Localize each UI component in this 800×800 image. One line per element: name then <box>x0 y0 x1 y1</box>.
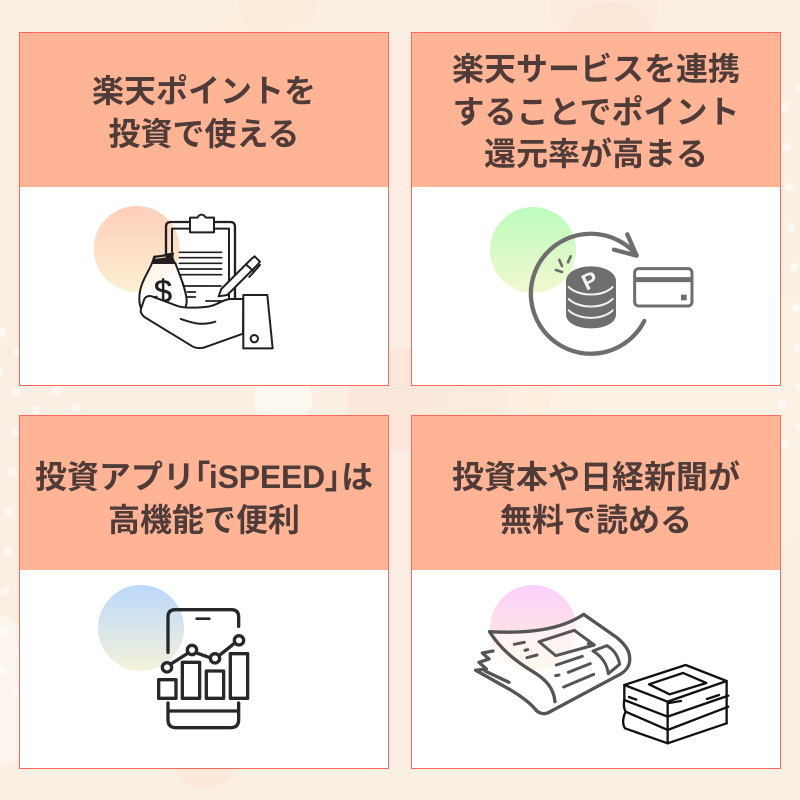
icon: smartphone with growth chart <box>98 585 250 730</box>
header band 2 <box>412 33 780 187</box>
heading 2: 楽天サービスを連携 <box>452 51 740 87</box>
header band 3 <box>20 416 388 570</box>
heading 3 <box>35 459 373 538</box>
icon: newspaper and books <box>474 585 730 744</box>
header band 1 <box>20 33 388 187</box>
header band 4 <box>412 416 780 570</box>
panel: 楽天サービスを連携することでポイント還元率が高まる <box>411 32 781 386</box>
heading 3: 投資アプリ「iSPEED」は <box>35 459 373 495</box>
heading 1: 楽天ポイントを <box>92 73 316 109</box>
heading 2: することでポイント <box>452 94 740 130</box>
icon: point coins and card cycle <box>490 207 694 356</box>
heading 2: 還元率が高まる <box>484 136 708 172</box>
heading 4 <box>452 459 740 538</box>
heading 2 <box>452 51 740 172</box>
heading 1: 投資で使える <box>108 116 300 152</box>
heading 4: 無料で読める <box>500 502 692 538</box>
heading 1 <box>92 73 316 152</box>
icon: point coins and card cycle: P <box>577 265 602 295</box>
heading 3: 高機能で便利 <box>108 502 300 538</box>
panel: 楽天ポイントを投資で使える <box>19 32 389 386</box>
heading 4: 投資本や日経新聞が <box>452 459 740 495</box>
icon: money bag, clipboard and hand: $ <box>154 272 172 309</box>
panel: 投資本や日経新聞が無料で読める <box>411 415 781 769</box>
panel: 投資アプリ「iSPEED」は高機能で便利 <box>19 415 389 769</box>
icon: money bag, clipboard and hand <box>94 206 274 350</box>
